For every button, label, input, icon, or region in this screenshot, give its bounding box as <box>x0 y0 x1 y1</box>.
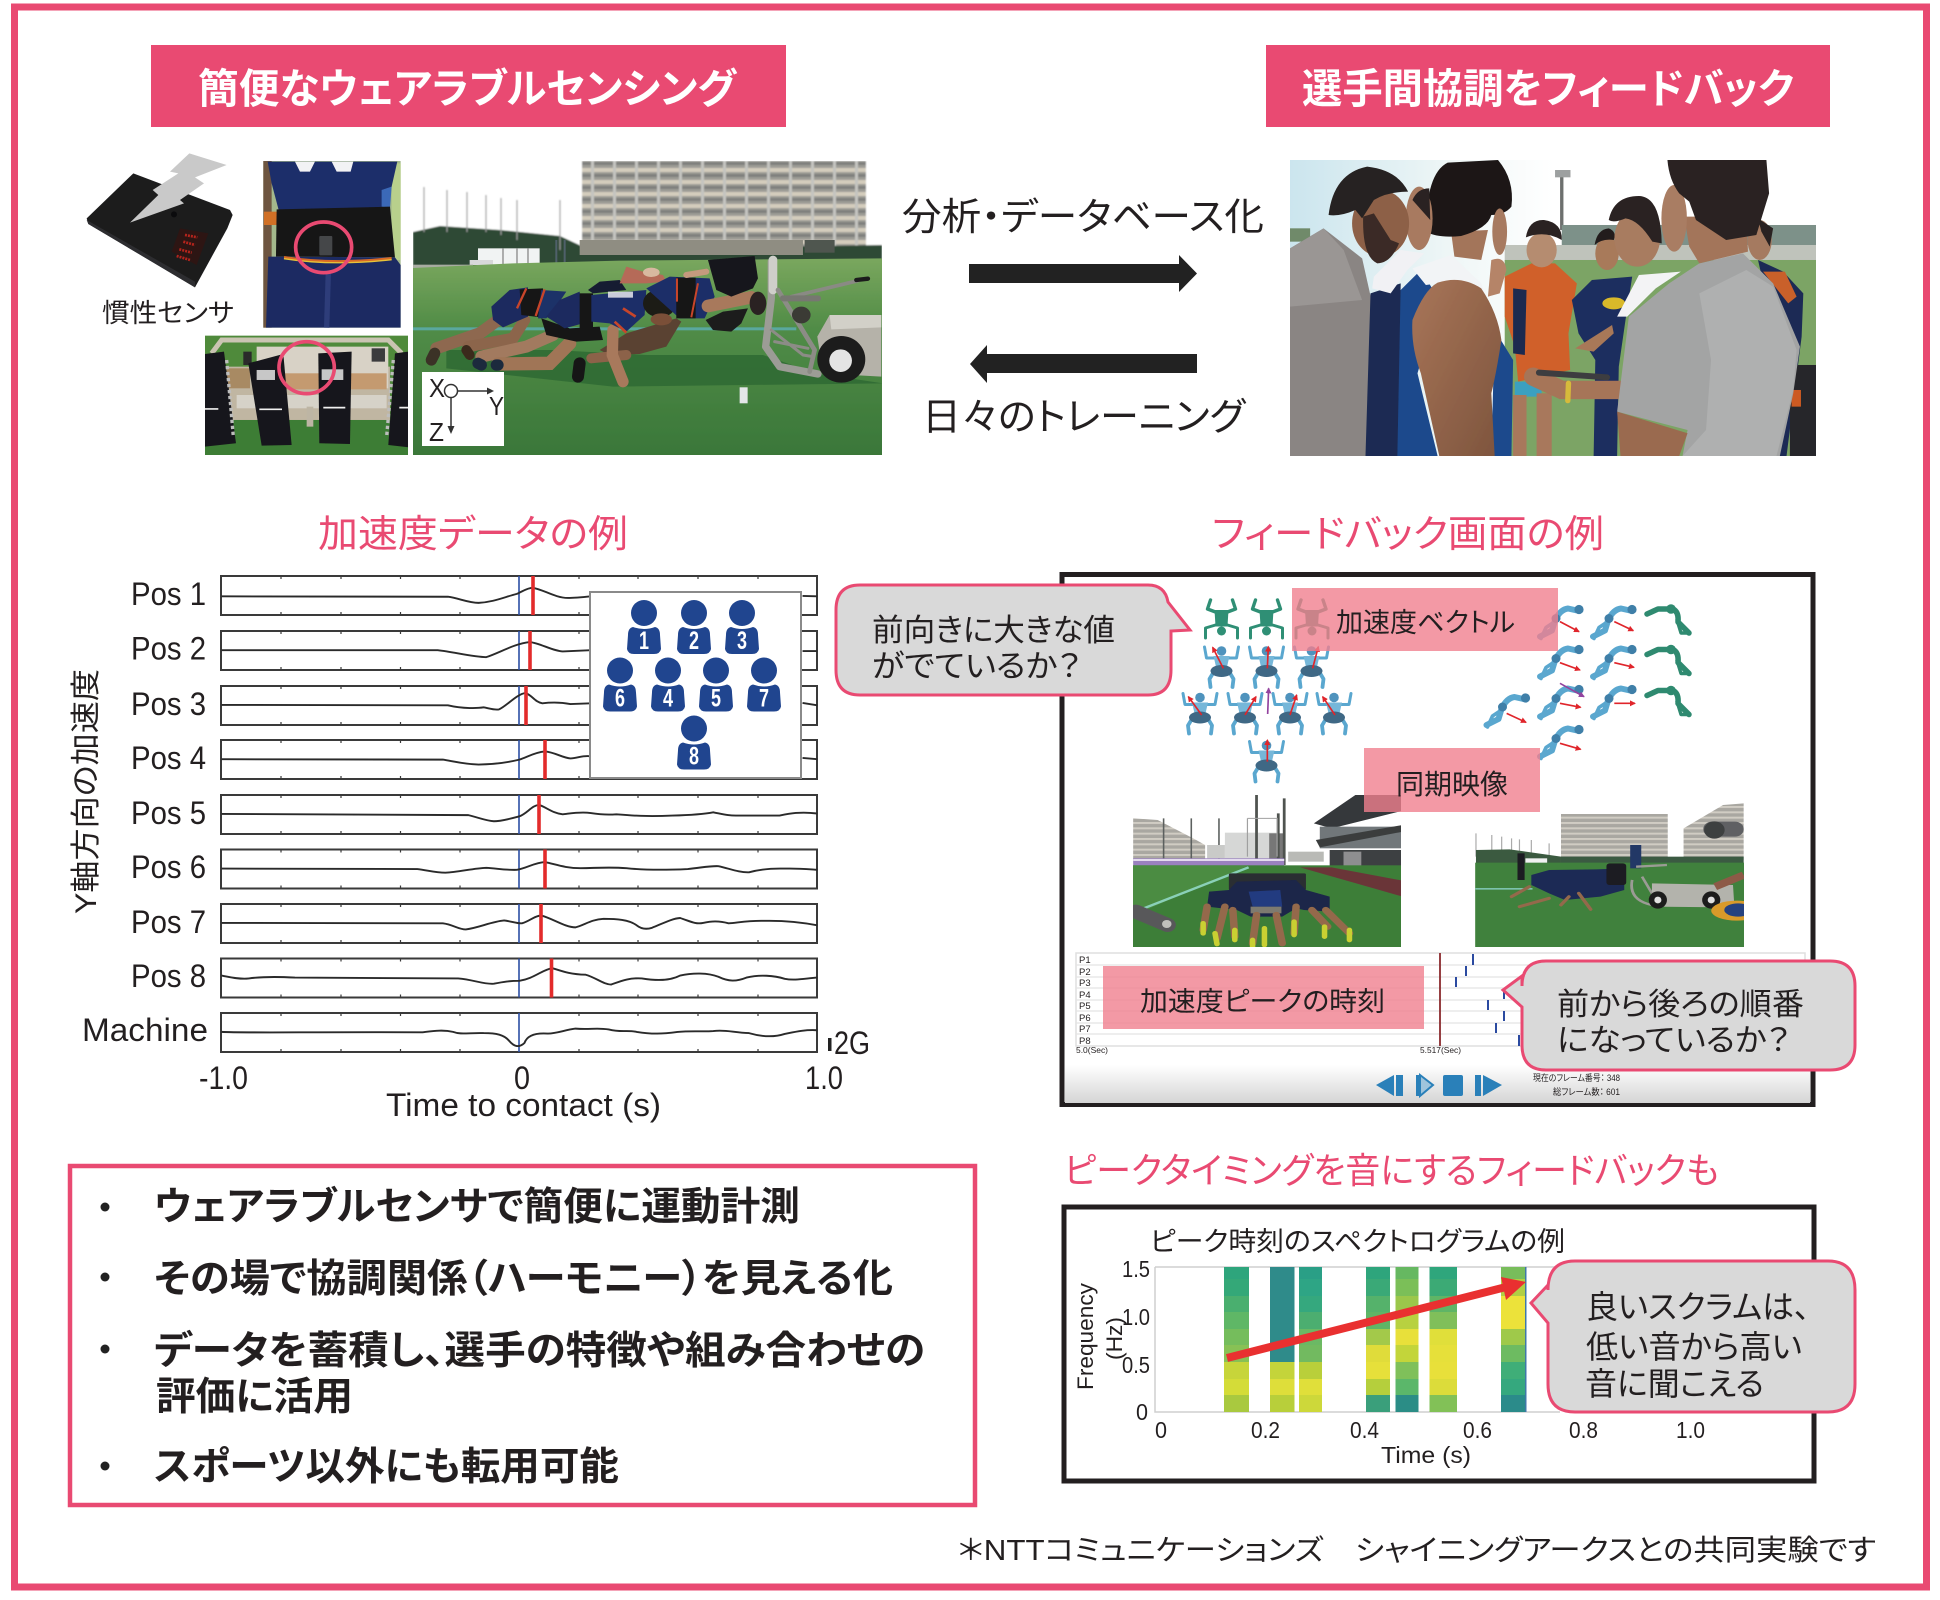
rear player <box>431 318 525 360</box>
callout: order from front to back <box>1503 961 1855 1070</box>
photo: sensor on waist <box>263 161 401 328</box>
row labels: Pos 8 <box>131 958 206 994</box>
figure: navy jersey coach <box>1572 228 1632 456</box>
plot axes <box>1155 1267 1560 1412</box>
y tick labels: 0 <box>1136 1399 1148 1425</box>
playback controls: 現在のフレーム番号： 348 <box>1533 1072 1620 1083</box>
y axis title: (Hz) <box>1102 1317 1127 1360</box>
callout: forward value: がでているか？ <box>872 649 1081 684</box>
lead player <box>646 277 715 318</box>
photo: players discussing <box>1290 160 1816 456</box>
callout: good scrum sound: 低い音から高い <box>1586 1329 1802 1365</box>
acceleration vector arrows <box>1188 622 1635 762</box>
arrow: right <box>969 255 1197 292</box>
figure: orange jersey coach <box>1505 220 1577 456</box>
timeline: peak timing: P7 <box>1079 1024 1091 1035</box>
timeline: peak timing: P5 <box>1079 1001 1091 1012</box>
timeline: peak timing: 5.517(Sec) <box>1420 1045 1461 1055</box>
x tick labels: 0.4 <box>1350 1417 1379 1443</box>
timeline: peak timing: P1 <box>1079 955 1091 966</box>
inset: player positions: 4 <box>663 684 673 712</box>
row labels: Machine <box>82 1012 208 1048</box>
x tick labels: 0.8 <box>1569 1417 1598 1443</box>
bullet 3 <box>100 1329 925 1419</box>
bar 7 <box>1501 1267 1526 1412</box>
timeline: peak timing: P4 <box>1079 990 1091 1001</box>
y axis title <box>1073 1283 1127 1390</box>
photo: scrum machine practice <box>413 161 883 455</box>
figure: right background player <box>1748 218 1816 456</box>
trace lines <box>221 588 817 1046</box>
label: acceleration vector: 加速度ベクトル <box>1336 608 1515 638</box>
bar 6 <box>1430 1267 1457 1412</box>
row labels: Pos 4 <box>131 740 206 776</box>
x tick labels: 0.6 <box>1463 1417 1492 1443</box>
bullet 3: 評価に活用 <box>156 1376 353 1419</box>
section title: acceleration data: 加速度データの例 <box>318 514 628 556</box>
figures: side view of scrum <box>1486 604 1689 758</box>
label: analysis and database: 分析・データベース化 <box>902 197 1264 239</box>
inset: player positions: 8 <box>689 742 699 770</box>
icon: inertial sensor device <box>87 153 233 287</box>
panel: summary bullets <box>70 1166 975 1505</box>
header: wearable sensing: 簡便なウェアラブルセンシング <box>198 66 738 112</box>
x tick labels: 1.0 <box>1676 1417 1705 1443</box>
figures: front view of scrum <box>1183 600 1351 782</box>
tablet and arm <box>1533 373 1620 401</box>
header: feedback of coordination: 選手間協調をフィードバック <box>1302 66 1794 112</box>
row labels: Pos 6 <box>131 849 206 885</box>
bullet 1: ウェアラブルセンサで簡便に運動計測 <box>154 1185 800 1229</box>
bullet 3: データを蓄積し、選手の特徴や組み合わせの <box>154 1329 925 1373</box>
front player legs <box>478 330 626 382</box>
back row player <box>588 280 626 293</box>
spectrogram title: ピーク時刻のスペクトログラムの例 <box>1150 1227 1565 1257</box>
bullet 2: その場で協調関係（ハーモニー）を見える化 <box>154 1258 893 1301</box>
playback controls <box>1065 1065 1810 1103</box>
bullet 4: スポーツ以外にも転用可能 <box>154 1446 619 1489</box>
y axis title: Frequency <box>1073 1283 1098 1390</box>
bar 2 <box>1270 1267 1294 1412</box>
red peak markers <box>526 576 552 998</box>
icon: axis legend: Z <box>429 417 444 447</box>
icon: axis legend <box>422 372 504 447</box>
y tick labels <box>1122 1256 1150 1425</box>
header: wearable sensing <box>151 45 786 127</box>
label: synchronized video: 同期映像 <box>1396 769 1508 800</box>
callout: good scrum sound: 良いスクラムは、 <box>1586 1289 1810 1325</box>
label: acceleration vector <box>1292 588 1558 651</box>
video: side view <box>1475 803 1744 947</box>
row labels <box>82 576 208 1048</box>
axis tick labels: 0 <box>514 1060 530 1096</box>
callout: order from front to back: になっているか？ <box>1557 1023 1790 1058</box>
timeline: peak timing: P6 <box>1079 1013 1091 1024</box>
row labels: Pos 7 <box>131 904 206 940</box>
timeline: peak timing: 5.0(Sec) <box>1076 1045 1108 1055</box>
row labels: Pos 5 <box>131 795 206 831</box>
panel: feedback screen <box>1062 574 1813 1104</box>
figure: talking player <box>1575 196 1681 352</box>
bar 5 <box>1396 1267 1418 1412</box>
inset: player positions: 1 <box>639 627 649 655</box>
inset: player positions: 7 <box>759 684 769 712</box>
row labels: Pos 2 <box>131 630 206 666</box>
bar 1 <box>1224 1267 1249 1412</box>
timeline: peak timing: P8 <box>1079 1036 1091 1047</box>
x tick labels: 0 <box>1155 1417 1167 1443</box>
sled <box>766 260 868 374</box>
playback controls: 総フレーム数： 601 <box>1553 1086 1620 1097</box>
footnote: ＊NTTコミュニケーションズ シャイニングアークスとの共同実験です <box>958 1534 1876 1567</box>
timeline: peak timing <box>1076 953 1805 1055</box>
x axis title: Time to contact (s) <box>386 1087 661 1123</box>
icon: highlight ring on waist <box>296 222 352 273</box>
axis tick labels: -1.0 <box>199 1060 248 1096</box>
panel: spectrogram <box>1064 1207 1814 1481</box>
timeline: peak timing: P3 <box>1079 978 1091 989</box>
inset: player positions: 6 <box>615 684 625 712</box>
label: synchronized video <box>1364 748 1540 812</box>
callout: forward value <box>836 585 1190 695</box>
figure: central player back <box>1389 160 1513 456</box>
label: peak time <box>1103 966 1424 1029</box>
inset: player positions: 3 <box>737 627 747 655</box>
label: daily training: 日々のトレーニング <box>922 397 1247 439</box>
y axis label: Y軸方向の加速度 <box>70 669 103 914</box>
x tick labels: 0.2 <box>1251 1417 1280 1443</box>
bar 4 <box>1366 1267 1390 1412</box>
y tick labels: 0.5 <box>1122 1352 1150 1378</box>
axis tick labels <box>199 1060 843 1096</box>
figure: grey shirt player front right <box>1617 160 1800 456</box>
callout: forward value: 前向きに大きな値 <box>872 613 1115 648</box>
arrow: rising pitch <box>1227 1277 1526 1358</box>
section title: sound feedback: ピークタイミングを音にするフィードバックも <box>1064 1150 1719 1191</box>
icon: axis legend: Y <box>489 391 504 421</box>
header: feedback of coordination <box>1266 45 1830 127</box>
y tick labels: 1.5 <box>1122 1256 1150 1282</box>
axis tick labels: 1.0 <box>805 1060 843 1096</box>
x axis title: Time (s) <box>1381 1442 1471 1468</box>
x tick labels <box>1155 1417 1705 1443</box>
inset: player positions: 5 <box>711 684 721 712</box>
callout: good scrum sound: 音に聞こえる <box>1585 1366 1764 1402</box>
y tick labels: 1.0 <box>1122 1304 1150 1330</box>
video: rear view <box>1132 795 1403 949</box>
icon: highlight ring on machine <box>279 342 334 394</box>
callout: order from front to back: 前から後ろの順番 <box>1557 987 1804 1022</box>
icon: axis legend: X <box>429 373 445 403</box>
inset: player positions <box>590 592 801 778</box>
panel frames <box>221 576 817 1052</box>
callout: good scrum sound <box>1531 1261 1855 1412</box>
label: peak time: 加速度ピークの時刻 <box>1140 987 1385 1017</box>
bar 3 <box>1299 1267 1322 1412</box>
chart: acceleration traces <box>82 576 870 1123</box>
inset: player positions: 2 <box>689 627 699 655</box>
label: inertial sensor: 慣性センサ <box>102 298 234 328</box>
row labels: Pos 1 <box>131 576 206 612</box>
photo: sensor on machine <box>205 336 408 455</box>
arrow: left <box>970 345 1197 383</box>
section title: feedback screen: フィードバック画面の例 <box>1212 514 1604 556</box>
scale bar 2G: 2G <box>834 1025 870 1061</box>
shirtless torso under <box>600 318 681 355</box>
figure: bearded player <box>1290 167 1433 456</box>
timeline: peak timing: P2 <box>1079 967 1091 978</box>
row labels: Pos 3 <box>131 686 206 722</box>
